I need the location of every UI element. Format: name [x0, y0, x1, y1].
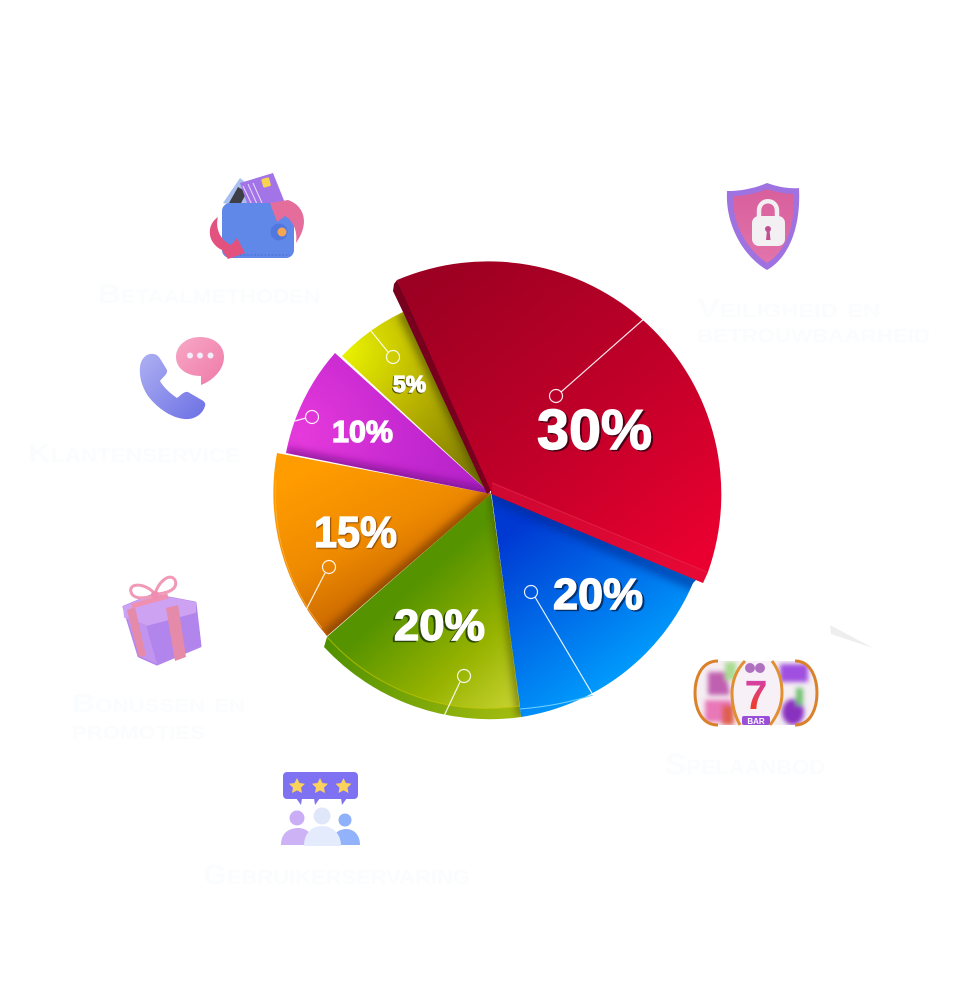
label: Veiligheid en betrouwbaarheid: Veiligheid en [697, 293, 880, 323]
slice: blue 20%: 20% [553, 570, 643, 619]
slice: green 20%: 20% [394, 601, 485, 650]
slice: green 20% [324, 494, 522, 719]
slice: yellow 5% [342, 312, 491, 494]
icon: security shield with padlock [727, 183, 799, 270]
label: Betaalmethoden: Betaalmethoden [98, 279, 320, 309]
icon: gift box [124, 577, 200, 664]
label: Veiligheid en betrouwbaarheid: betrouwbaarheid [697, 318, 930, 348]
icon: slot machine reels: 7 [745, 672, 767, 718]
icon: wallet with cards [210, 173, 304, 259]
slice: magenta 10% [286, 353, 491, 494]
icon: slot machine reels [690, 661, 820, 726]
icon: slot machine reels: BAR [747, 717, 765, 726]
label: Bonussen en promoties: promoties [72, 715, 205, 745]
label: Spelaanbod: Spelaanbod [665, 749, 825, 781]
label: Klantenservice: Klantenservice [28, 438, 240, 468]
slice: orange 15% [273, 453, 491, 636]
label: Gebruikerservaring: Gebruikerservaring [203, 859, 470, 890]
slice: yellow 5%: 5% [393, 371, 426, 397]
slice: red 30% [393, 261, 721, 583]
slice: magenta 10%: 10% [332, 414, 393, 449]
slice: orange 15%: 15% [314, 508, 397, 557]
slice: blue 20% [491, 490, 700, 717]
slice: red 30%: 30% [537, 398, 652, 462]
icon: phone and speech bubble [140, 337, 224, 419]
label: Bonussen en promoties: Bonussen en [72, 688, 245, 718]
decorative paper shard [830, 625, 873, 648]
icon: user reviews [281, 772, 360, 846]
pie chart [273, 261, 721, 719]
